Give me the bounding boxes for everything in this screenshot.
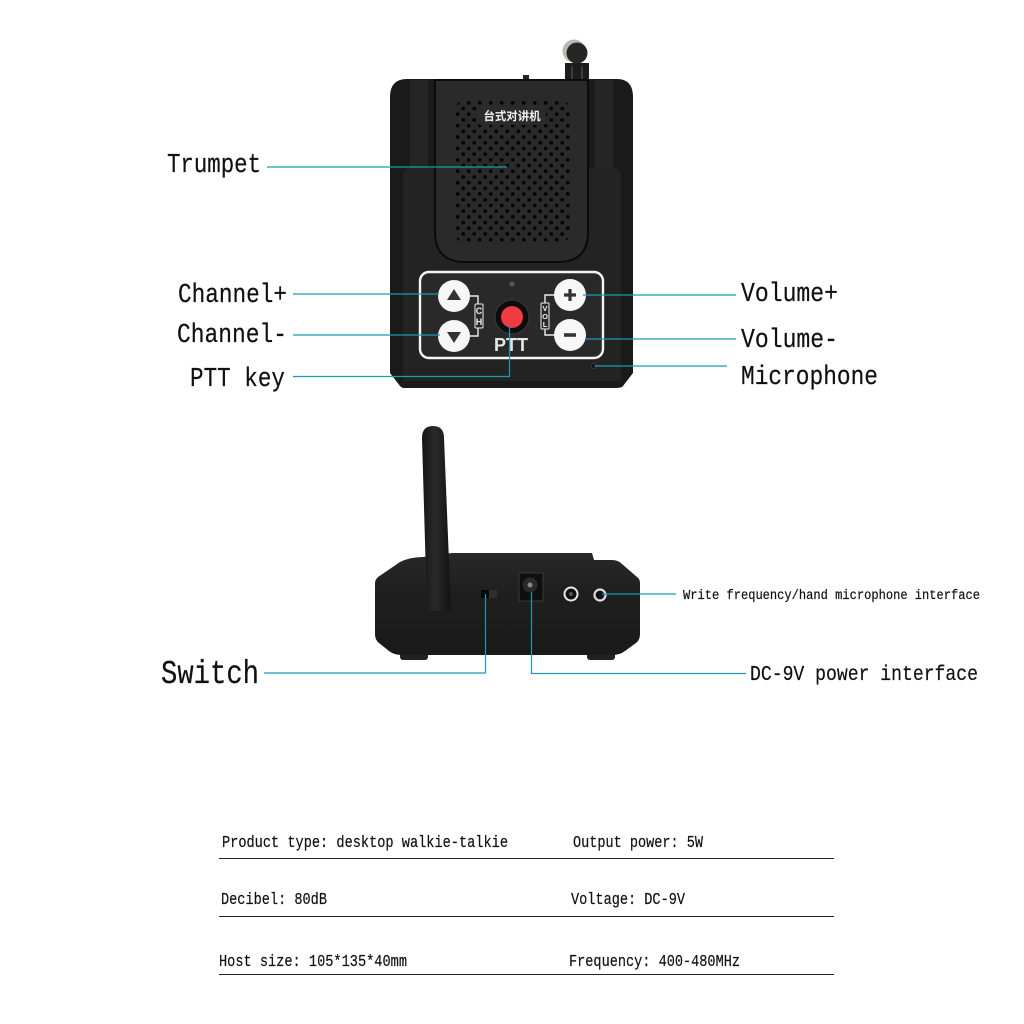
volume bracket: V: [542, 304, 548, 313]
label: Microphone: Microphone: [741, 363, 878, 393]
button: channel down: [438, 320, 470, 352]
antenna: [422, 426, 451, 611]
button: volume up: [554, 279, 586, 311]
front view of walkie-talkie: [390, 40, 633, 388]
label: PTT key: PTT key: [190, 365, 285, 395]
label: Volume+: Volume+: [741, 280, 838, 310]
specification table: [219, 833, 834, 975]
table rules: [219, 858, 834, 975]
label: Channel+: Channel+: [178, 281, 287, 311]
audio jack: [564, 588, 578, 600]
microphone hole: [592, 364, 596, 368]
rubber feet: [400, 652, 615, 660]
icon: top antenna stub: [523, 40, 589, 81]
volume bracket: L: [543, 320, 548, 329]
side view of walkie-talkie: [375, 426, 640, 660]
power switch: [481, 590, 497, 598]
label: Switch: Switch: [161, 656, 259, 693]
channel bracket: H: [476, 317, 482, 327]
channel bracket: C: [476, 306, 483, 316]
volume bracket: [541, 295, 556, 335]
label: Trumpet: Trumpet: [167, 151, 261, 181]
volume bracket: O: [542, 312, 548, 321]
DC jack: [519, 573, 543, 601]
control panel: [420, 272, 603, 358]
spec: output power: Output power: 5W: [573, 833, 703, 852]
brand label: 台式对讲机: [484, 109, 541, 123]
spec: host size: Host size: 105*135*40mm: [219, 952, 407, 971]
label: DC-9V power interface: DC-9V power interface: [750, 664, 978, 687]
spec: decibel: Decibel: 80dB: [221, 890, 327, 909]
button: PTT: PTT: [494, 335, 528, 355]
spec: voltage: Voltage: DC-9V: [571, 890, 685, 909]
label: write frequency interface: Write frequency/hand microphone interface: [683, 589, 980, 604]
cradle wings and lower face: [403, 168, 621, 381]
button: PTT: [494, 300, 529, 355]
speaker grille: [455, 100, 570, 243]
brand label: [478, 106, 546, 125]
label: Channel-: Channel-: [177, 321, 287, 351]
button: channel up: [438, 280, 470, 312]
body upper stripes: [410, 80, 613, 168]
side body: [375, 553, 640, 655]
connector lines: [264, 167, 746, 674]
spec: product type: Product type: desktop walkie-talkie: [222, 833, 508, 852]
speaker plate: [435, 80, 588, 262]
channel bracket: [468, 296, 483, 336]
spec: frequency: Frequency: 400-480MHz: [569, 952, 740, 971]
label: Volume-: Volume-: [741, 326, 838, 356]
button: volume down: [554, 319, 586, 351]
programming jack: [594, 590, 606, 600]
device body: [390, 79, 633, 388]
